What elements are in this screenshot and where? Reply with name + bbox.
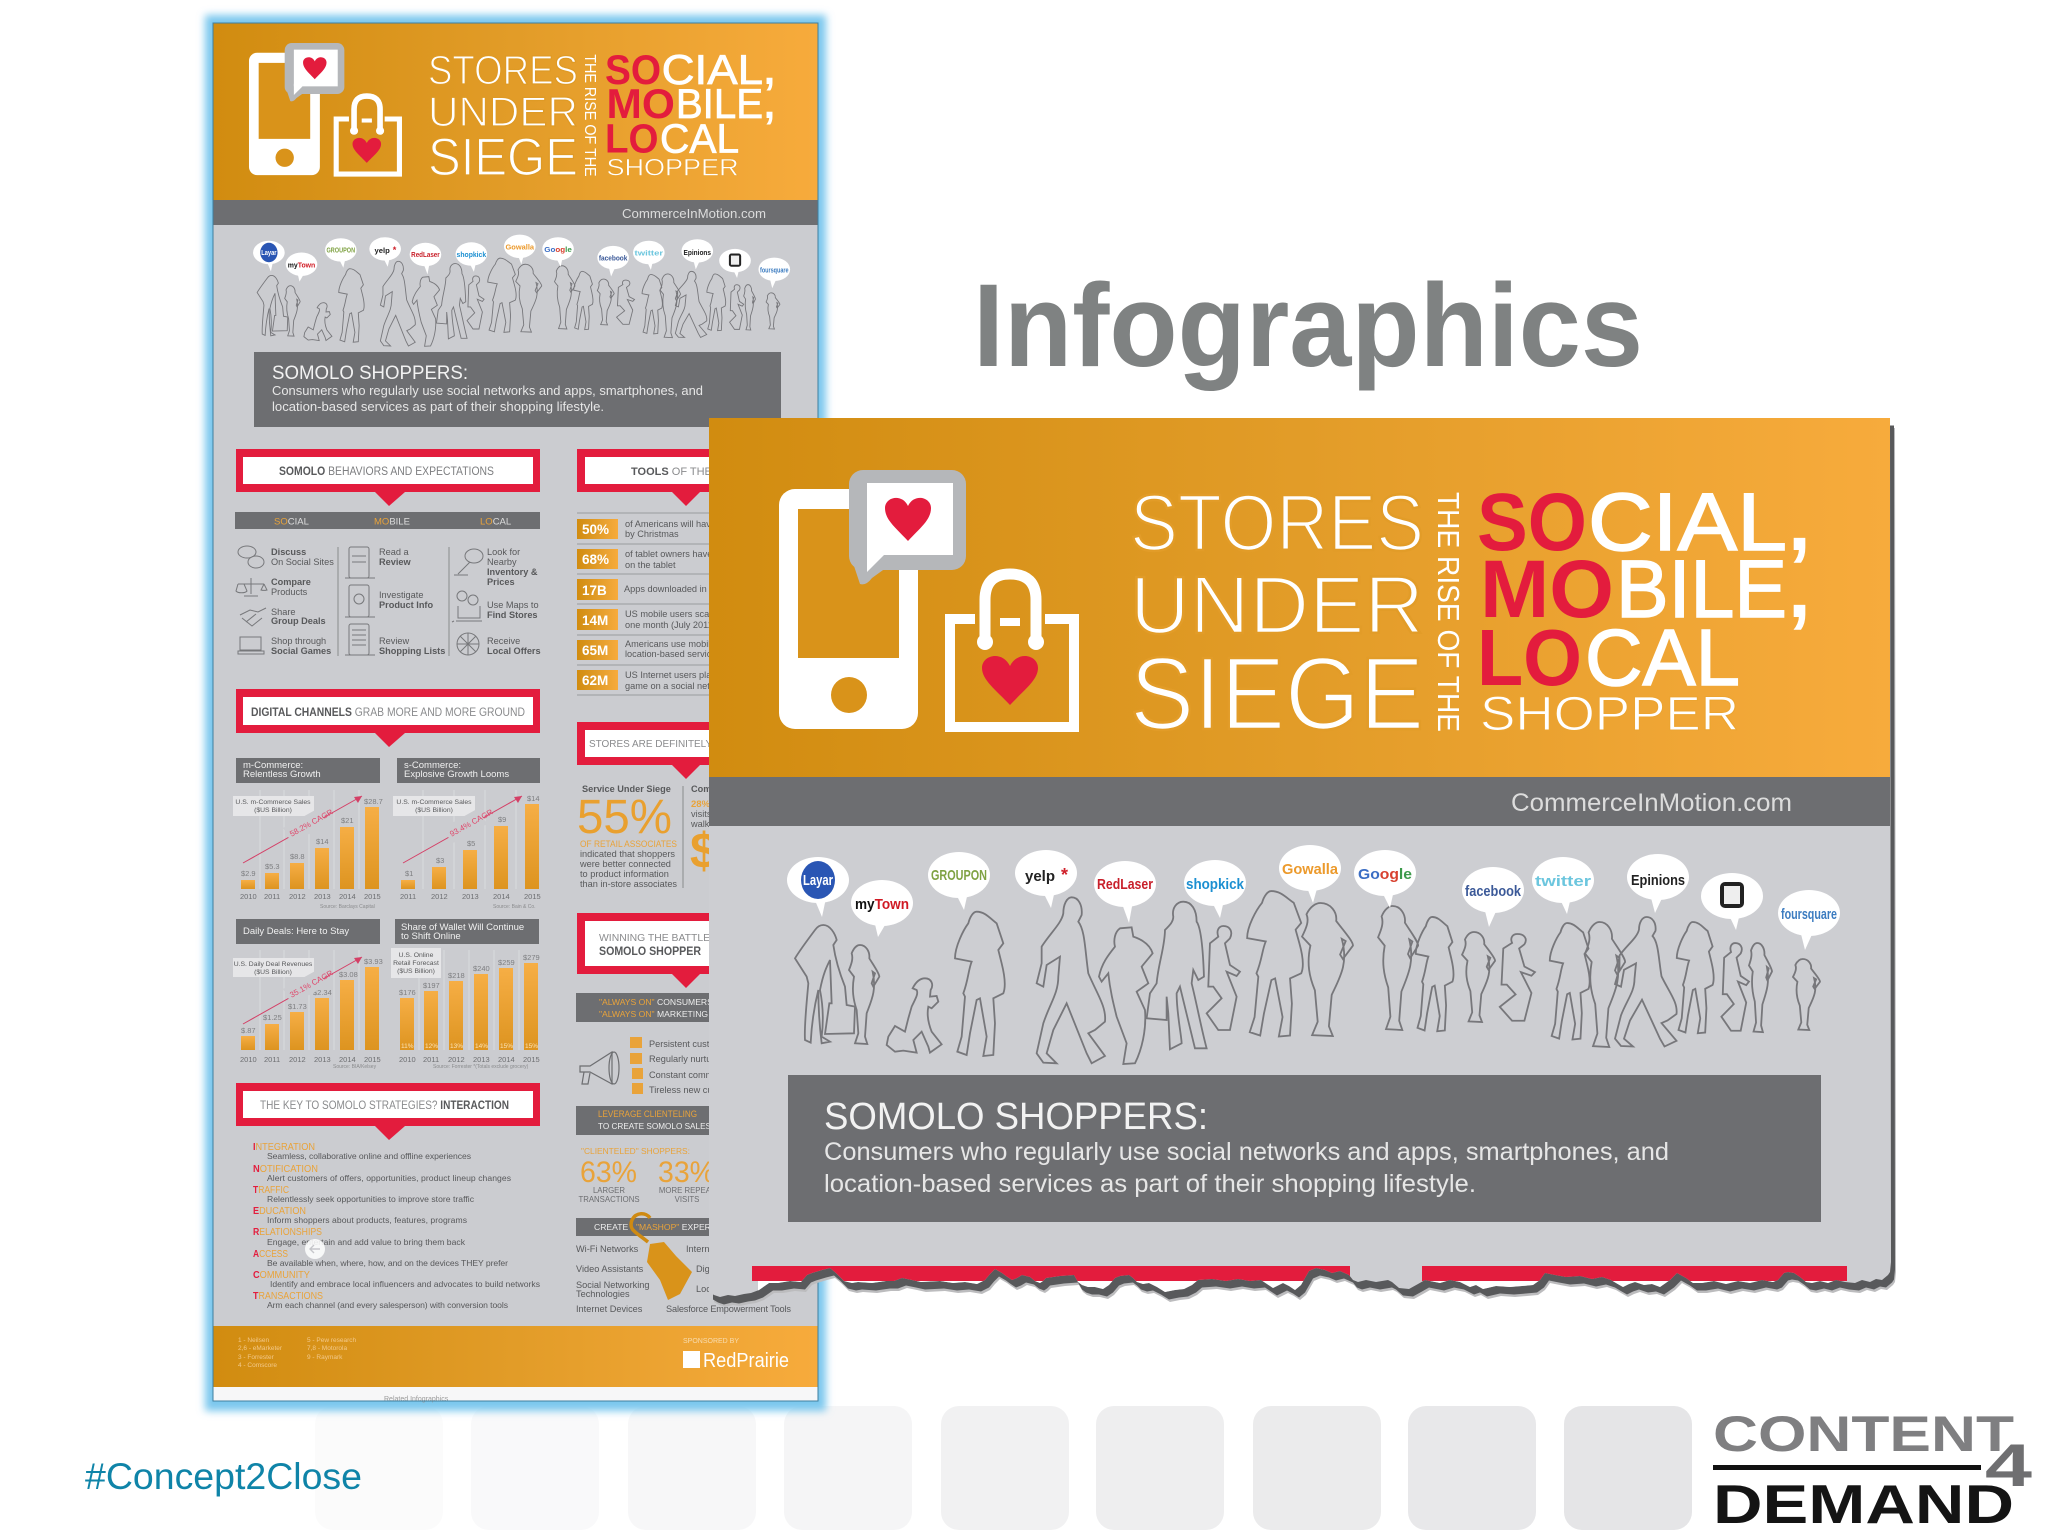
logo: content 4 demand (1713, 1406, 2033, 1535)
chart: share of wallet: 2010 (399, 1055, 416, 1064)
headline: social mobile local shopper: CIAL (1588, 477, 1787, 568)
headline: social mobile local shopper: , (1788, 544, 1811, 635)
chart: m-Commerce: $2.9 (241, 869, 256, 878)
headline: social mobile local shopper: SHOPPER (1480, 688, 1739, 741)
interaction acronym list: Seamless, collaborative online and offline experiences (267, 1151, 471, 1161)
chart: share of wallet: Source: Forrester *(Totals exclude grocery) (433, 1064, 529, 1070)
small poster header: CAL (660, 116, 739, 162)
interaction acronym list: EDUCATION (253, 1206, 306, 1217)
tools statistics list: by Christmas (625, 529, 679, 539)
chart: share of wallet: $240 (473, 964, 490, 973)
chart: s-Commerce: $14 (527, 794, 540, 803)
small poster header: CIAL (662, 46, 763, 93)
interaction acronym list: Arm each channel (and every salesperson) with conversion tools (267, 1300, 508, 1310)
chart: daily deals: $3.08 (339, 970, 358, 979)
chart: daily deals: 2012 (289, 1055, 306, 1064)
chart: m-Commerce: 2012 (289, 892, 306, 901)
behaviors: mobile column: Review (379, 636, 409, 646)
chart: daily deals: 2015 (364, 1055, 381, 1064)
crowd of shoppers with brand speech bubbles: yelp (1025, 868, 1055, 885)
small definition box: Consumers who regularly use social networks and apps, smartphones, and (272, 383, 703, 398)
mashop technology labels: Social Networking (576, 1280, 650, 1290)
tools statistics list: 68% (582, 552, 609, 567)
big header (709, 418, 1890, 777)
chart: daily deals: $1.73 (288, 1002, 307, 1011)
panel: small infographic poster (213, 23, 818, 1403)
crowd of shoppers with brand speech bubbles: Google (1358, 866, 1412, 883)
chart: daily deals: $.87 (241, 1026, 256, 1035)
crowd of shoppers with brand speech bubbles (787, 845, 1840, 1064)
clienteled stats: "CLIENTELED" SHOPPERS: (581, 1146, 690, 1156)
chart: m-Commerce (233, 758, 383, 910)
small poster footer: SPONSORED BY (683, 1338, 739, 1345)
behaviors: social column: Shop through (271, 636, 326, 646)
behaviors: local column: Receive (487, 636, 520, 646)
behaviors: local column: Local Offers (487, 646, 541, 656)
small poster footer: RedPrairie (703, 1350, 789, 1372)
small poster footer: 2,6 - eMarketer (238, 1345, 283, 1352)
hashtag: #Concept2Close (85, 1456, 362, 1497)
chart: share of wallet: ($US Billion) (397, 968, 435, 975)
service under siege stat: visits (691, 809, 712, 819)
chart: m-Commerce: $14 (316, 837, 329, 846)
chart: m-Commerce: ($US Billion) (254, 807, 292, 814)
small site band (213, 200, 818, 225)
site band: CommerceInMotion.com (1511, 789, 1792, 817)
crowd of shoppers with brand speech bubbles: GROUPON (931, 867, 987, 884)
small poster header (213, 23, 818, 200)
small poster header: MO (606, 80, 675, 127)
chart: m-Commerce: 2013 (314, 892, 331, 901)
service under siege stat: $ (690, 823, 718, 879)
section header: tools (577, 449, 795, 506)
small poster footer: 7,8 - Motorola (307, 1345, 347, 1352)
chart: s-Commerce (393, 758, 541, 910)
marketing tactics list: Persistent customer (649, 1039, 730, 1049)
poster glow (205, 15, 826, 1411)
interaction acronym list: TRAFFIC (253, 1185, 289, 1196)
chart: share of wallet: 2013 (473, 1055, 490, 1064)
small poster footer (213, 1326, 818, 1403)
behaviors: social column: Share (271, 607, 296, 617)
chart: m-Commerce: 2010 (240, 892, 257, 901)
mashop bar (576, 1218, 795, 1236)
chart: s-Commerce: 2015 (524, 892, 541, 901)
tools statistics list (577, 513, 795, 695)
clienteling bar (576, 1106, 795, 1135)
mashop technology labels: Local (696, 1284, 718, 1294)
always on bar: "ALWAYS ON" CONSUMERS (599, 997, 713, 1007)
crowd of shoppers with brand speech bubbles: facebook (1465, 883, 1522, 900)
chart: daily deals: $1.25 (263, 1013, 282, 1022)
headline: social mobile local shopper: MO (1480, 544, 1614, 635)
service under siege stat: were better connected (579, 859, 671, 869)
tools statistics list: of Americans will have a smartphone (625, 519, 775, 529)
headline: social mobile local shopper: SO (1477, 477, 1587, 568)
small poster footer: 5 - Pew research (307, 1337, 357, 1344)
small definition box: SOMOLO SHOPPERS: (272, 363, 468, 384)
headline: social mobile local shopper (1477, 477, 1811, 741)
chart: s-Commerce: ($US Billion) (415, 807, 453, 814)
chart: share of wallet: 15% (500, 1043, 513, 1050)
tools statistics list: on the tablet (625, 560, 676, 570)
headline: stores under siege: STORES (1130, 478, 1424, 567)
icon: megaphone (580, 1052, 619, 1084)
behaviors: social column: Products (271, 587, 308, 597)
chart: share of wallet: $279 (523, 953, 540, 962)
behaviors: mobile column: Shopping Lists (379, 646, 445, 656)
interaction acronym list: NOTIFICATION (253, 1164, 318, 1175)
chart: s-Commerce: 93.4% CAGR (448, 807, 495, 839)
chart: share of wallet: $197 (423, 981, 440, 990)
small poster header: SHOPPER (606, 155, 739, 182)
chart: share of wallet: 2014 (498, 1055, 515, 1064)
vertical text: THE RISE OF THE (1431, 492, 1466, 732)
social mobile local bar (235, 512, 540, 529)
crowd of shoppers with brand speech bubbles: foursquare (1781, 906, 1837, 923)
marketing tactics list: Constant communication (649, 1070, 750, 1080)
chart: share of wallet: Retail Forecast (393, 960, 439, 967)
clienteled stats (578, 1146, 715, 1204)
interaction acronym list: ACCESS (253, 1249, 288, 1260)
interaction acronym list: Relentlessly seek opportunities to improve store traffic (267, 1194, 475, 1204)
behaviors: mobile column: Product Info (379, 600, 433, 610)
small poster footer: 3 - Forrester (238, 1354, 275, 1361)
mashop technology labels: Salesforce Empowerment Tools (666, 1304, 791, 1314)
chart: daily deals: Daily Deals: Here to Stay (243, 926, 349, 937)
service under siege stat: walk (690, 819, 710, 829)
headline: social mobile local shopper: , (1788, 477, 1811, 568)
small definition box: location-based services as part of their shopping lifestyle. (272, 399, 604, 414)
chart: share of wallet: 2012 (448, 1055, 465, 1064)
mashop technology labels (576, 1244, 791, 1314)
mashop technology labels: Technologies (576, 1289, 630, 1299)
social mobile local bar: LOCAL (480, 516, 511, 528)
panel: enlarged torn infographic excerpt (709, 418, 1896, 1307)
small site band: CommerceInMotion.com (622, 206, 766, 221)
clienteled stats: VISITS (675, 1195, 699, 1204)
crowd of shoppers with brand speech bubbles: Epinions (1631, 872, 1685, 889)
chart: share of wallet (391, 919, 540, 1070)
headline: stores under siege: SIEGE (1130, 636, 1424, 751)
section header: stores (577, 722, 795, 779)
headline: stores under siege: UNDER (1130, 560, 1424, 651)
chart: m-Commerce: $21 (341, 816, 354, 825)
interaction acronym list: COMMUNITY (253, 1270, 310, 1281)
crowd of shoppers with brand speech bubbles: * (1061, 865, 1068, 885)
tools statistics list: US Internet users play a (625, 670, 724, 680)
site band (709, 777, 1890, 826)
small poster header: THE RISE OF THE (581, 54, 598, 177)
section header: digital channels: DIGITAL CHANNELS GRAB MORE AND MORE GROUND (251, 705, 525, 719)
chart: daily deals: 2014 (339, 1055, 356, 1064)
logo: content 4 demand: CONTENT (1713, 1406, 2014, 1462)
chart: daily deals: 2011 (264, 1055, 280, 1064)
crowd of shoppers with brand speech bubbles: shopkick (1186, 876, 1245, 893)
clienteled stats: TRANSACTIONS (578, 1195, 640, 1204)
mashop technology labels: Internet (686, 1244, 718, 1254)
chart: m-Commerce: 2014 (339, 892, 356, 901)
chart: share of wallet: $176 (399, 988, 416, 997)
behaviors: social column: On Social Sites (271, 557, 334, 567)
chart: s-Commerce: $9 (498, 815, 506, 824)
behaviors: social column: Group Deals (271, 616, 326, 626)
section header: interaction (236, 1083, 540, 1140)
chart: s-Commerce: $5 (467, 839, 475, 848)
chart: share of wallet: 13% (450, 1043, 463, 1050)
chart: m-Commerce: $5.3 (265, 862, 280, 871)
always on bar: "ALWAYS ON" MARKETING (599, 1009, 708, 1019)
chart: daily deals: 35.1% CAGR (288, 968, 335, 1000)
logo: content 4 demand: 4 (1985, 1432, 2033, 1499)
clienteling bar: LEVERAGE CLIENTELING (598, 1109, 697, 1119)
small poster footer: Related Infographics (384, 1396, 449, 1403)
small poster header: BILE (676, 80, 763, 127)
section header: interaction: THE KEY TO SOMOLO STRATEGIES? INTERACTION (260, 1098, 509, 1112)
interaction acronym list: TRANSACTIONS (253, 1291, 323, 1302)
chart: daily deals: $3.93 (364, 957, 383, 966)
chart: share of wallet: 14% (475, 1043, 488, 1050)
chart: share of wallet: to Shift Online (401, 931, 461, 942)
behaviors: local column: Nearby (487, 557, 517, 567)
mashop technology labels: Video Assistants (576, 1264, 644, 1274)
behaviors: local column: Use Maps to (487, 600, 539, 610)
chart: daily deals: 2013 (314, 1055, 331, 1064)
tools statistics list: 14M (582, 613, 608, 628)
crowd of shoppers with brand speech bubbles: RedLaser (1097, 876, 1153, 893)
crowd of shoppers with brand speech bubbles: Layar (803, 872, 833, 889)
behaviors: local column: Find Stores (487, 610, 538, 620)
definition box: SOMOLO SHOPPERS: (824, 1096, 1208, 1138)
chart: m-Commerce: U.S. m-Commerce Sales (235, 799, 311, 806)
behaviors: mobile column (338, 547, 449, 656)
chart: m-Commerce: 2015 (364, 892, 381, 901)
section header: behaviors: SOMOLO BEHAVIORS AND EXPECTATIONS (279, 466, 494, 478)
tools statistics list: game on a social network (625, 681, 730, 691)
chart: daily deals: 2010 (240, 1055, 257, 1064)
service under siege stat: Service Under Siege (582, 784, 671, 794)
small poster footer: 1 - Neilsen (238, 1337, 269, 1344)
behaviors: mobile column: Review (379, 557, 412, 567)
chart: s-Commerce: Source: Bain & Co. (493, 904, 536, 910)
service under siege stat: Compare (691, 784, 731, 794)
chart: share of wallet: U.S. Online (399, 952, 434, 959)
crowd of shoppers with brand speech bubbles: twitter (1535, 873, 1591, 890)
clienteled stats: MORE REPEAT (659, 1186, 715, 1195)
marketing tactics list (630, 1037, 750, 1095)
marketing tactics list: Regularly nurture (649, 1054, 719, 1064)
service under siege stat: to product information (580, 869, 669, 879)
interaction acronym list (253, 1142, 540, 1310)
behaviors: mobile column: Investigate (379, 590, 423, 600)
title: Infographics (973, 260, 1643, 392)
small poster header: LO (605, 116, 659, 162)
chart: share of wallet: 15% (525, 1043, 538, 1050)
section header: stores: STORES ARE DEFINITELY FEELING IT (589, 739, 769, 750)
definition box: Consumers who regularly use social networks and apps, smartphones, and (824, 1138, 1669, 1166)
section header: digital channels (236, 689, 540, 747)
chart: s-Commerce: Explosive Growth Looms (404, 769, 509, 780)
chart: share of wallet: $259 (498, 958, 515, 967)
tools statistics list: Americans use mobile (625, 639, 715, 649)
section header: winning the battle: WINNING THE BATTLE FOR THE (599, 933, 758, 944)
mashop technology labels: Wi-Fi Networks (576, 1244, 639, 1254)
headline: social mobile local shopper: CAL (1585, 613, 1740, 702)
interaction acronym list: Inform shoppers about products, features, programs (267, 1215, 467, 1225)
chart: m-Commerce: Relentless Growth (243, 769, 321, 780)
social mobile local bar: MOBILE (374, 516, 410, 528)
service under siege stat: than in-store associates (580, 879, 677, 889)
service under siege stat: OF RETAIL ASSOCIATES (580, 839, 677, 850)
definition box (788, 1075, 1821, 1222)
interaction acronym list: RELATIONSHIPS (253, 1227, 322, 1238)
service under siege stat: 28% (691, 799, 711, 810)
chart: m-Commerce: 2011 (264, 892, 280, 901)
tools statistics list: US mobile users scanned (625, 609, 730, 619)
behaviors: local column: Inventory & (487, 567, 538, 577)
chart: s-Commerce: $3 (436, 856, 444, 865)
always on bar (576, 993, 795, 1022)
chart: share of wallet: 2011 (423, 1055, 439, 1064)
chart: daily deals: Source: BIA/Kelsey (333, 1064, 377, 1070)
tools statistics list: 65M (582, 643, 608, 658)
chart: s-Commerce: s-Commerce: (404, 760, 461, 771)
chart: s-Commerce: 2014 (493, 892, 510, 901)
small poster header: UNDER (428, 88, 578, 135)
chart: m-Commerce: $28.7 (364, 797, 383, 806)
tools statistics list: 50% (582, 522, 609, 537)
behaviors: social column: Discuss (271, 547, 306, 557)
interaction acronym list: Be available when, where, how, and on the devices THEY prefer (267, 1258, 508, 1268)
chart: s-Commerce: $1 (405, 869, 413, 878)
mashop bar: CREATE (594, 1222, 628, 1232)
behaviors: local column (452, 547, 541, 656)
icon: mashop shopping tag (631, 1214, 692, 1300)
nav arrow left (305, 1239, 325, 1259)
behaviors: local column: Prices (487, 577, 515, 587)
chart: m-Commerce: 58.2% CAGR (288, 807, 335, 839)
chart: daily deals (233, 919, 383, 1070)
small definition box (254, 352, 781, 427)
section header: behaviors (236, 449, 540, 506)
behaviors: social column: Social Games (271, 646, 331, 656)
chart: daily deals: ($US Billion) (254, 969, 292, 976)
chart: daily deals: $2.34 (313, 988, 332, 997)
section header: winning the battle (577, 913, 795, 988)
small poster footer: 9 - Raymark (307, 1354, 343, 1361)
chart: share of wallet: 12% (425, 1043, 438, 1050)
headline: social mobile local shopper: LO (1477, 613, 1582, 702)
small poster header: , (764, 80, 775, 127)
service under siege stat: indicated that shoppers (580, 849, 675, 859)
behaviors: local column: Look for (487, 547, 520, 557)
chart: share of wallet: $218 (448, 971, 465, 980)
mashop bar: "MASHOP" EXPERIENCES (636, 1222, 743, 1232)
section header: winning the battle: SOMOLO SHOPPER (599, 946, 702, 958)
clienteled stats: 33% (658, 1156, 715, 1189)
logo: content 4 demand: DEMAND (1713, 1473, 2014, 1535)
mashop technology labels: Internet Devices (576, 1304, 643, 1314)
tools statistics list: location-based services (625, 649, 721, 659)
interaction acronym list: Engage, entertain and add value to bring them back (267, 1237, 466, 1247)
interaction acronym list: Identify and embrace local influencers and advocates to build networks (270, 1279, 540, 1289)
chart: s-Commerce: 2013 (462, 892, 479, 901)
tools statistics list: 17B (582, 583, 607, 598)
social mobile local bar: SOCIAL (274, 516, 309, 528)
small poster header: SO (605, 46, 661, 93)
definition box: location-based services as part of their shopping lifestyle. (824, 1170, 1476, 1198)
behaviors: social column (236, 546, 334, 656)
chart: m-Commerce: m-Commerce: (243, 760, 303, 771)
small poster footer: 4 - Comscore (238, 1362, 277, 1369)
clienteling bar: TO CREATE SOMOLO SALES (598, 1122, 712, 1131)
small poster header: SIEGE (428, 128, 578, 187)
chart: m-Commerce: Source: Barclays Capital (320, 904, 375, 910)
chart: share of wallet: Share of Wallet Will Continue (401, 922, 524, 933)
chart: s-Commerce: 2011 (400, 892, 416, 901)
crowd of shoppers with brand speech bubbles: myTown (855, 896, 909, 913)
torn section header strips (752, 1266, 1847, 1292)
service under siege stat: 55% (577, 791, 672, 844)
tools statistics list: 62M (582, 673, 608, 688)
tools statistics list: one month (July 2011) (625, 620, 716, 630)
mashop technology labels: Digital (696, 1264, 722, 1274)
chart: m-Commerce: $8.8 (290, 852, 305, 861)
crowd of shoppers with brand speech bubbles: Gowalla (1282, 861, 1339, 878)
chart: s-Commerce: 2012 (431, 892, 448, 901)
icon: phone, speech bubble and shopping bag (779, 470, 1074, 729)
chart: s-Commerce: U.S. m-Commerce Sales (396, 799, 472, 806)
behaviors: social column: Compare (271, 577, 311, 587)
chart: share of wallet: 2015 (523, 1055, 540, 1064)
chart: share of wallet: 11% (401, 1043, 414, 1050)
marketing tactics list: Tireless new customer (649, 1085, 741, 1095)
behaviors: mobile column: Read a (379, 547, 410, 557)
headline: social mobile local shopper: BILE (1616, 544, 1787, 635)
interaction acronym list: INTEGRATION (253, 1142, 315, 1153)
service under siege stat (577, 784, 731, 889)
clienteled stats: LARGER (593, 1186, 625, 1195)
small poster header: , (764, 46, 775, 93)
section header: tools: TOOLS OF THE TRADE (631, 466, 752, 478)
small crowd with logo bubbles (253, 235, 790, 346)
clienteled stats: 63% (580, 1156, 637, 1189)
chart: daily deals: U.S. Daily Deal Revenues (234, 961, 313, 968)
tools statistics list: Apps downloaded in 2011 (624, 584, 729, 594)
interaction acronym list: Alert customers of offers, opportunities, product lineup changes (267, 1173, 511, 1183)
background squares strip (315, 1406, 1692, 1530)
headline: stores under siege (1130, 478, 1424, 751)
tools statistics list: of tablet owners have (625, 549, 712, 559)
small poster header: STORES (428, 47, 578, 93)
